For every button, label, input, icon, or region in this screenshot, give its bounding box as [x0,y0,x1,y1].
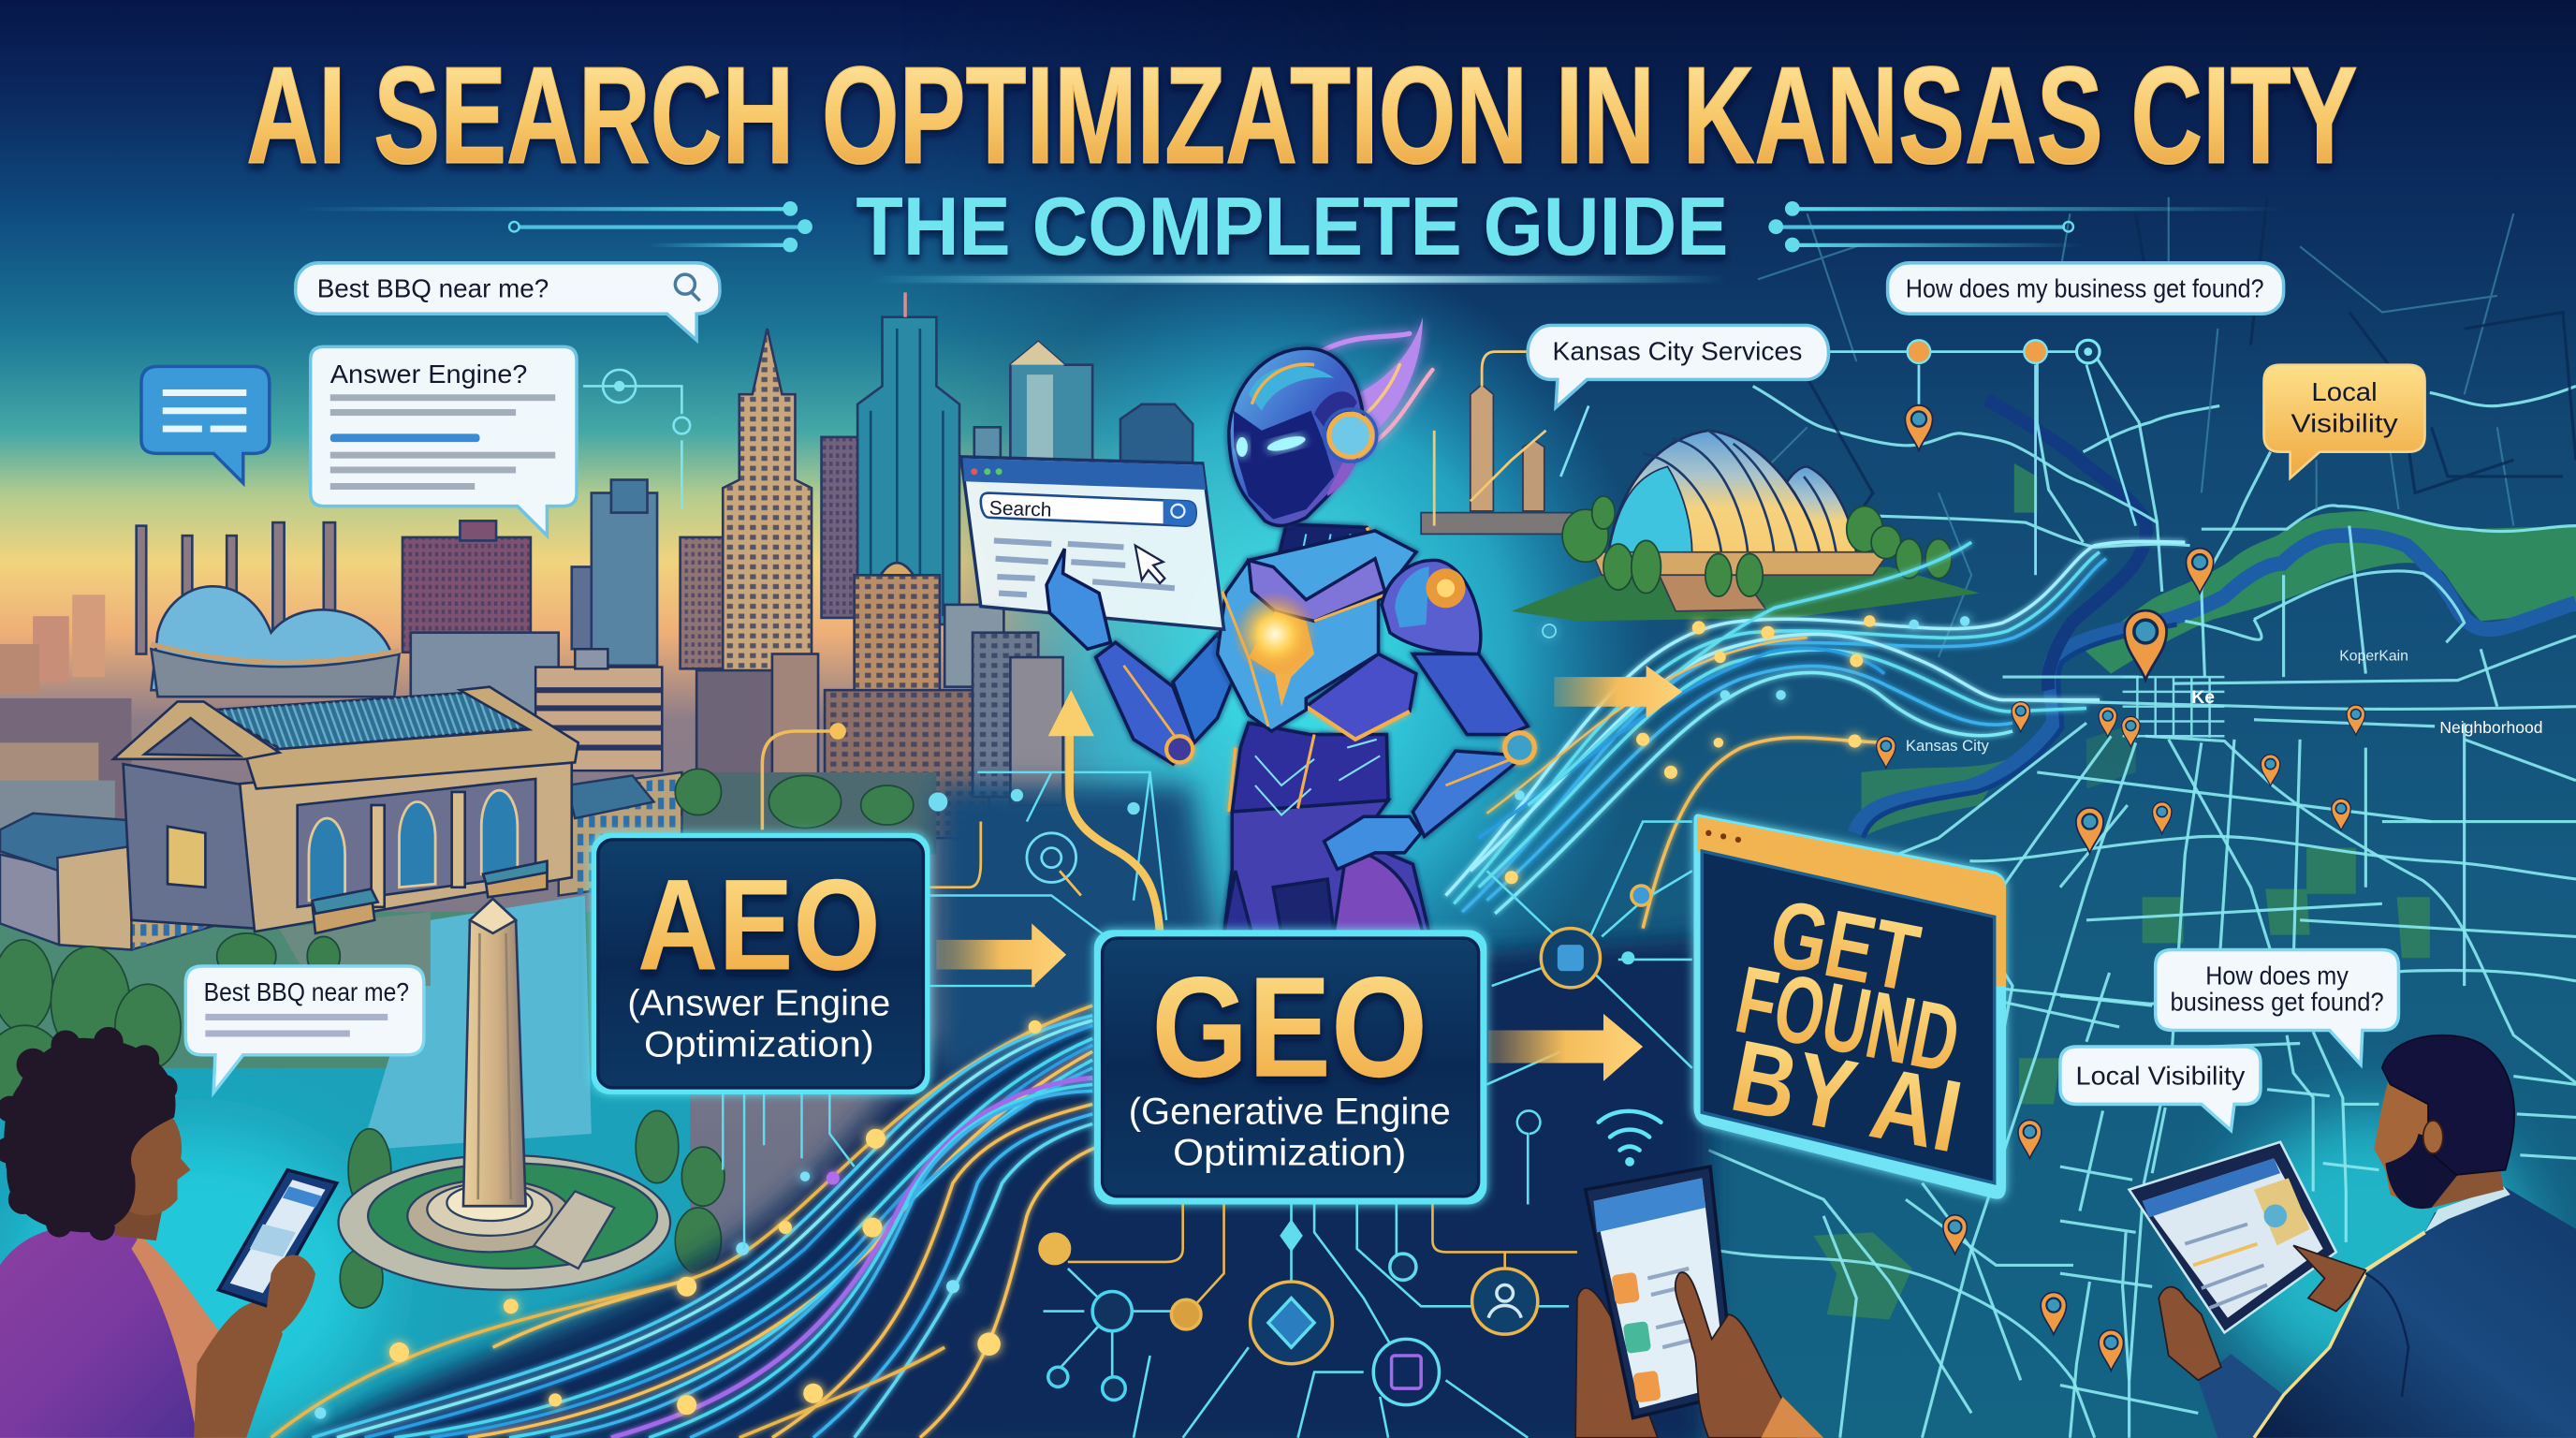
bubble: How does my business get found (man) [2156,949,2398,1064]
robot: torso and legs [1218,524,1429,933]
bubble text line 1: How does my [2205,961,2349,990]
Get Found by AI panel [1694,814,2006,1199]
answer bubble highlight bar [330,433,479,442]
icon: target node above skyline [583,370,690,509]
bubble text line 2: business get found? [2170,987,2384,1016]
dark circuit panel background [279,936,1708,1438]
cyan glow behind man [2217,1109,2530,1388]
map: streets [1708,355,2576,1438]
GEO subtitle: (Generative Engine [1129,1091,1451,1132]
bubble: Kansas City Services [1528,326,1828,407]
Get Found text: BY AI: BY AI [1723,1019,1970,1175]
bubble text: How does my business get found? [1906,274,2264,303]
central cyan glow behind robot [944,246,1651,1068]
trees [0,769,914,1308]
bubble: Best BBQ near me (top) [296,263,720,340]
map label: Koperkain: KoperKain [2339,649,2408,665]
data nodes: lower left streams [315,1020,1042,1419]
GEO subtitle line 2: Optimization) [1173,1132,1406,1173]
AEO heading: AEO [637,853,881,998]
bubble text: Answer Engine? [330,360,527,389]
circuit lines from AEO box [723,731,1166,1249]
icon: blue chat bubble [141,366,270,483]
circuit nodes below GEO [1040,886,1651,1405]
arrow: GEO to Get Found [1488,1014,1643,1081]
bubble: Local Visibility (gold) [2264,365,2425,478]
connector nodes [1908,340,2100,363]
data streams: upper right [1445,541,2185,929]
GEO heading: GEO [1151,948,1427,1108]
bubble text line 2: Visibility [2291,409,2398,438]
AEO subtitle line 2: Optimization) [644,1025,874,1065]
bubble text: Best BBQ near me? [204,977,409,1006]
map label: Ke: Ke [2191,688,2215,708]
icon: magnifier [675,274,700,301]
map pins [1877,405,2365,1371]
man with tablet [2130,1035,2576,1438]
arrow: curved up toward robot [1048,690,1160,933]
map: parks and rivers [1814,399,2576,1319]
result lines [330,394,555,490]
Union Station: left wing [0,814,245,949]
Liberty Memorial tower [463,899,526,1206]
skyline: far buildings [0,292,1193,694]
Kansas City Services connector lines [1434,352,2136,575]
ground: mauve district and teal land [0,698,936,1438]
robot: hand on hip [1325,816,1421,869]
robot: flame hair [1325,317,1432,447]
bubble text: Local Visibility [2076,1061,2245,1090]
circuit nodes: near AEO [829,723,1138,896]
search field text: Search [988,497,1052,521]
arrow: toward map [1554,666,1682,718]
subtitle: THE COMPLETE GUIDE [856,181,1728,272]
data nodes: upper right streams [1505,615,1969,884]
map label: Kansas City: Kansas City [1906,737,1989,755]
skyline: near buildings [411,563,1063,838]
background: dark map base [941,0,2576,1438]
robot: glowing core [1232,592,1318,677]
Get Found text: GET: GET [1762,879,1927,1012]
robot: pointing hand [1046,549,1110,649]
result lines [205,1014,388,1036]
robot: shoulder pad [1382,560,1481,654]
Kansas City monument towers [1421,385,1573,534]
arrow: AEO to GEO [936,923,1066,988]
map: faint background streets [1741,198,2513,657]
woman with phone [0,1027,337,1438]
phone with hands [1575,1167,1823,1438]
map label: Neighborhood: Neighborhood [2439,718,2543,737]
AEO subtitle: (Answer Engine [627,984,890,1024]
Liberty Memorial plaza [339,1155,670,1290]
bubble text line 1: Local [2311,377,2378,406]
bubble: Local Visibility (man) [2060,1047,2261,1131]
Get Found text: FOUND: FOUND [1728,946,1968,1093]
dome arena [151,586,399,697]
circuit: below GEO [1043,822,1708,1438]
decorative circuit lines: right of subtitle [1768,201,2285,252]
GEO panel [1094,930,1486,1204]
robot: head [1229,348,1377,525]
bubble: Best BBQ near me (woman) [185,966,424,1093]
bubble: Answer Engine [311,346,577,536]
browser window held by robot [961,457,1224,629]
decorative circuit lines: left of subtitle [296,201,812,252]
bubble text: Best BBQ near me? [317,274,549,303]
wifi icon [1599,1111,1661,1164]
circuit panel background: left of robot [936,785,1216,1084]
bubble text: Kansas City Services [1553,336,1802,365]
Union Station: right wing [559,772,681,896]
map: dark outlines upper right [1808,198,2576,542]
Union Station: main hall [113,687,578,933]
bubble: How does my business get found (top) [1888,263,2284,314]
robot: arms behind torso [1096,634,1534,836]
AEO panel [592,833,929,1094]
data streams: lower left [271,1005,1097,1438]
skyline: tan art-deco tower [723,329,812,674]
striped office building [535,649,662,770]
Kauffman Center building [1512,431,1980,621]
glow line under subtitle [871,276,1725,283]
